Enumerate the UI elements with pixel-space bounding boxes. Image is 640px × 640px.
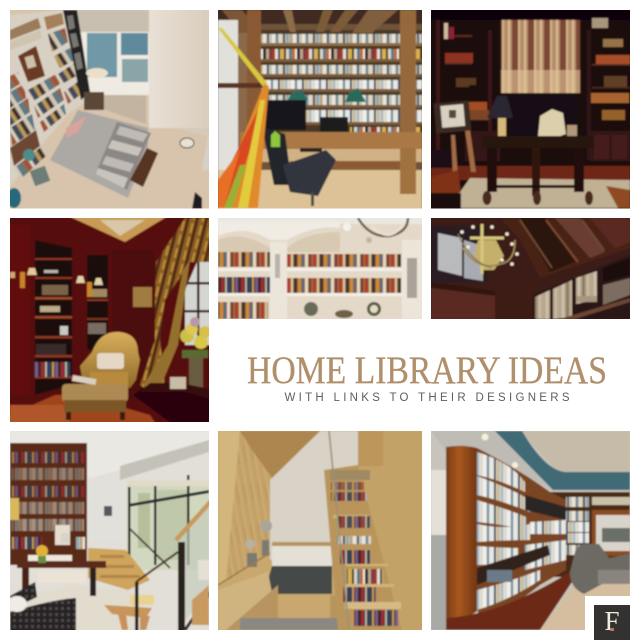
plywood ceiling	[238, 431, 320, 478]
title block	[247, 349, 607, 404]
window with shutters	[431, 226, 487, 282]
office chair	[262, 127, 336, 206]
ceiling	[520, 431, 630, 475]
photo: bright living room with bookcase and stairs	[10, 431, 209, 630]
basket and foreground objects	[180, 138, 194, 148]
wood base and floor	[446, 570, 580, 630]
window	[80, 32, 149, 95]
panels	[10, 225, 30, 395]
floor and rug	[431, 166, 630, 180]
grey armchair	[570, 544, 630, 594]
glass balustrade and rail	[128, 498, 214, 632]
framed picture on easel	[434, 100, 476, 178]
photo: mahogany library with armchair	[10, 218, 209, 422]
arch trim	[218, 222, 340, 240]
right book wall	[533, 255, 630, 319]
roman blind	[501, 20, 580, 93]
ceiling beams	[210, 0, 430, 33]
wall sconces	[10, 268, 103, 297]
tall windows	[127, 475, 209, 570]
table lamp	[487, 96, 513, 136]
writing desk	[17, 545, 106, 596]
left bookcase	[34, 240, 72, 395]
middle panel	[510, 95, 578, 137]
desk and monitor	[218, 100, 422, 210]
photo: loft library with hammock and desk	[218, 10, 422, 208]
logo badge	[594, 605, 630, 640]
wood ceiling	[431, 218, 630, 278]
plywood wall left	[218, 431, 270, 585]
ladder	[63, 10, 90, 100]
back wall shelves	[550, 492, 630, 577]
book shelves	[260, 34, 422, 137]
photo: dark traditional study	[431, 10, 630, 208]
cream rug	[10, 585, 150, 630]
gold chandelier	[458, 224, 519, 274]
photo: vaulted library with chandelier	[431, 218, 630, 319]
bookshelf wall	[0, 10, 88, 186]
bench	[130, 148, 158, 187]
silk curtain	[140, 218, 215, 392]
window	[185, 255, 215, 345]
bed in niche	[264, 542, 332, 594]
lower wood panelling	[431, 284, 530, 319]
white pillars	[270, 242, 287, 322]
curved wood column	[446, 446, 478, 620]
photo: cream arched bookshelves	[218, 218, 422, 319]
open stair bookshelves	[324, 431, 402, 630]
mantel clock	[18, 46, 45, 82]
red leather chair	[431, 170, 461, 200]
left curtain	[218, 20, 238, 210]
niche decor vases	[245, 520, 272, 567]
right bookcase	[87, 255, 108, 350]
ceiling lights	[482, 434, 488, 440]
white corner behind logo	[585, 596, 640, 640]
wood posts	[247, 10, 261, 125]
writing desk	[482, 136, 594, 205]
photo: bright bedroom with wall of books	[10, 10, 209, 208]
chandelier ring	[358, 218, 408, 236]
logo letter: F	[604, 606, 620, 636]
photo: curved wood bookcase with blue ceiling	[431, 431, 630, 630]
tall bookcase	[10, 443, 87, 565]
blue soffit	[494, 431, 630, 490]
side table	[133, 388, 215, 430]
bed	[50, 110, 151, 198]
bedside lamp and table	[86, 68, 108, 78]
armchair	[80, 332, 140, 388]
green tag	[271, 131, 280, 147]
flowers in vase	[180, 317, 211, 388]
wood steps	[88, 548, 150, 590]
framed picture	[133, 287, 152, 307]
white plaster wall	[270, 431, 358, 560]
tufted ottoman	[62, 375, 128, 420]
big plywood side wall	[358, 431, 422, 630]
curved bookcase body	[477, 448, 566, 616]
round side table	[104, 595, 154, 630]
hammock	[218, 28, 269, 208]
floor carpet	[0, 395, 160, 430]
shelf decor	[304, 302, 381, 318]
subtitle text: WITH LINKS TO THEIR DESIGNERS	[284, 392, 570, 404]
orange chair	[606, 186, 630, 208]
book rows	[218, 252, 422, 319]
photo: plywood nook with stair shelves	[218, 431, 422, 630]
chair back	[538, 109, 566, 138]
plywood bench	[218, 572, 272, 630]
right shelves	[591, 18, 630, 120]
golden ceiling	[55, 210, 178, 242]
wicker armchair	[7, 582, 76, 632]
left shelves	[444, 23, 491, 120]
